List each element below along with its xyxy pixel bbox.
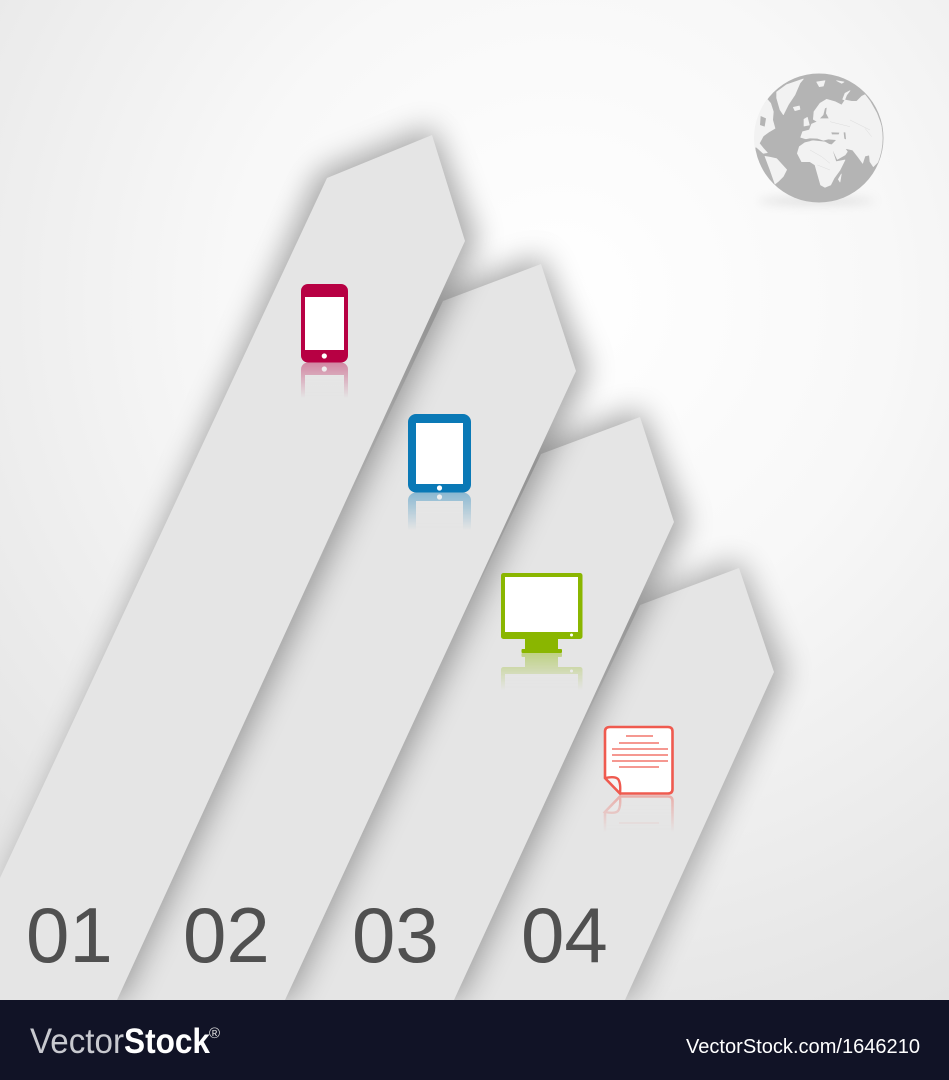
- North America: [754, 99, 776, 154]
- reflection: smartphone: [301, 362, 348, 395]
- panel 03 shape: [280, 417, 674, 1000]
- Iceland: [793, 106, 800, 111]
- Franz Josef islands: [837, 81, 844, 83]
- number 03: 03: [352, 891, 439, 979]
- panel 02 shape: [110, 264, 576, 1000]
- globe sphere: [754, 74, 884, 202]
- globe shadow: [758, 198, 874, 204]
- footer registered mark: ®: [209, 1025, 220, 1042]
- Novaya Zemlya: [843, 91, 850, 100]
- footer image id: VectorStock.com/1646210: [686, 1036, 920, 1058]
- footer logo: Vector: [30, 1022, 124, 1061]
- arrow panel 03: [280, 409, 686, 1000]
- reflection: desktop monitor: [501, 653, 582, 687]
- shadow of panel 03: [340, 409, 686, 1000]
- panel 04 shape: [450, 568, 774, 1000]
- arrow panel 02: [110, 256, 588, 1000]
- arrow panel 01: [0, 127, 477, 1000]
- icon: smartphone: [301, 284, 348, 362]
- Baltic Sea: [820, 108, 829, 118]
- continents: [747, 79, 887, 187]
- shadow of panel 02: [170, 256, 588, 1000]
- icon: desktop monitor: [501, 573, 582, 653]
- shadow of panel 01: [10, 127, 477, 1000]
- number 04: 04: [521, 891, 608, 979]
- globe: [747, 74, 887, 204]
- land borders: [810, 120, 872, 170]
- number 01: 01: [26, 891, 113, 979]
- Black Sea: [831, 132, 839, 134]
- footer logo bold part: Stock: [124, 1022, 210, 1061]
- Caspian Sea: [844, 132, 846, 139]
- Madagascar: [838, 174, 841, 182]
- footer bar: [0, 1000, 949, 1080]
- shadow of panel 04: [500, 560, 786, 1000]
- arrow panel 04: [450, 560, 786, 1000]
- South America: [765, 156, 787, 184]
- Eurasia and Africa: [797, 95, 887, 187]
- icon: note page: [605, 727, 672, 794]
- reflection: tablet: [408, 492, 471, 527]
- number 02: 02: [183, 891, 270, 979]
- icon: tablet: [408, 414, 471, 492]
- reflection: note page: [602, 794, 674, 827]
- Greenland: [777, 79, 803, 115]
- United Kingdom: [804, 117, 809, 126]
- Mediterranean Sea: [801, 138, 836, 144]
- panel 01 shape: [0, 135, 465, 1000]
- Hudson Bay: [760, 116, 766, 127]
- Svalbard: [817, 81, 825, 87]
